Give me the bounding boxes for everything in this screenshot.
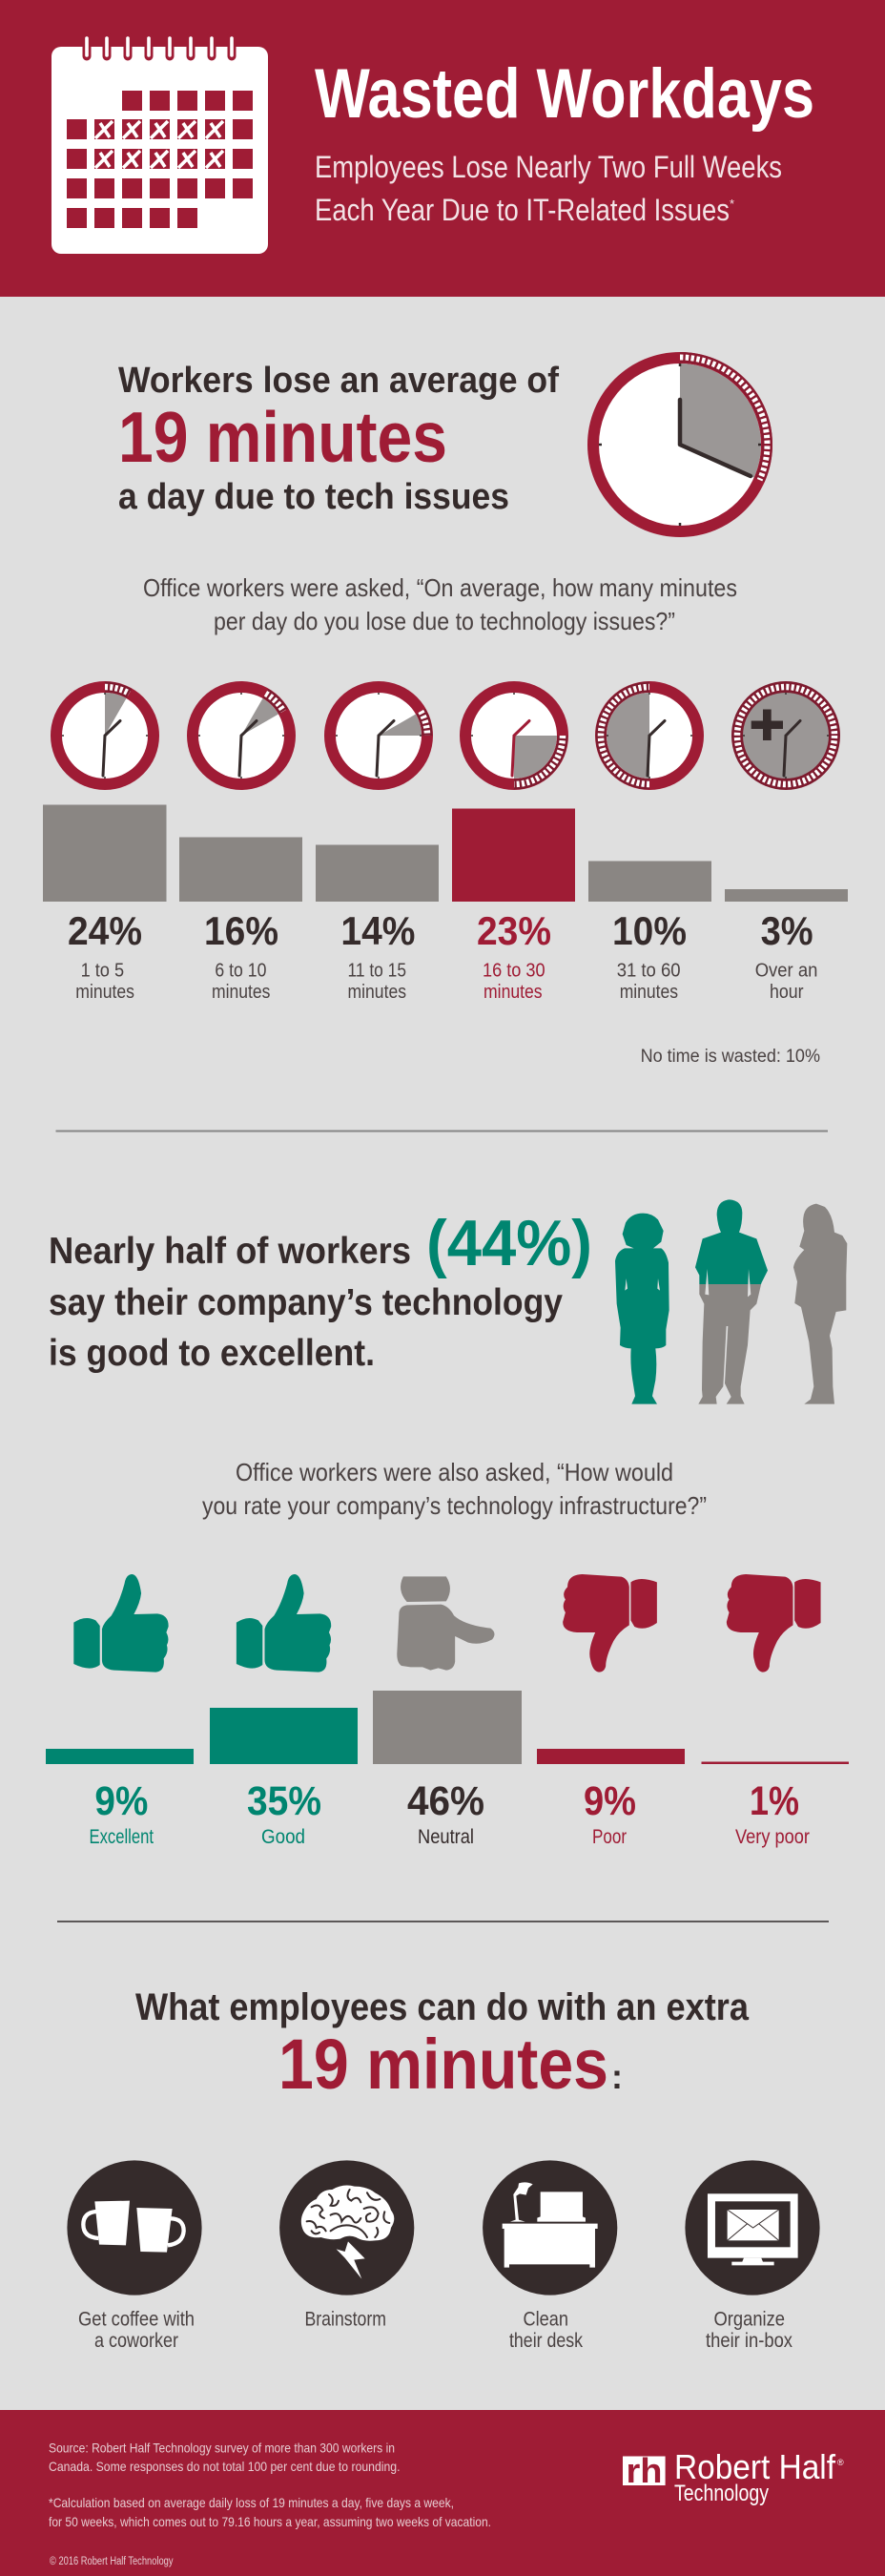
labels: activities: Organize [713,2309,785,2330]
bar labels: minutes lost: 31 to 60 [617,960,681,981]
heading: extra 19 minutes: 19 minutes [278,2025,608,2104]
logo: Robert Half Technology: Robert Half [674,2447,836,2486]
bar labels: minutes lost [75,960,817,1003]
bar labels: minutes lost: 6 to 10 [215,960,266,981]
percentages: technology rating: 35% [247,1778,321,1824]
percentages: technology rating: 9% [94,1778,148,1824]
bar labels: minutes lost: 11 to 15 [347,960,406,981]
bar labels: minutes lost: minutes [484,982,543,1003]
percentages: minutes lost: 3% [761,908,813,953]
subtitle: Employees Lose Nearly Two Full Weeks [315,150,782,184]
logo: Robert Half Technology: ® [837,2458,844,2467]
source notes: for 50 weeks, which comes out to 79.16 hours a year, assuming two weeks of vacation. [49,2514,491,2529]
labels: activities: Get coffee with [78,2309,195,2330]
icon: thumb up good [237,1574,331,1672]
silhouette: man [695,1199,768,1404]
question 2: Office workers were also asked, “How would [236,1458,673,1486]
heading: 19 minutes a day: 19 minutes [118,397,447,477]
heading: 44 percent: say their company’s technology [49,1282,563,1323]
percentages: minutes lost: 14% [340,908,415,953]
percentages: minutes lost: 16% [204,908,278,953]
clock: 1 to 5 minutes [51,681,159,790]
panel: header [0,0,885,297]
question 2: you rate your company’s technology infrastructure?” [202,1491,707,1520]
labels: activities: their desk [509,2330,583,2352]
heading: extra 19 minutes: What employees can do with an extra [135,1986,750,2028]
heading: 19 minutes a day: a day due to tech issues [118,477,509,517]
subtitle: * [730,197,734,211]
heading: 19 minutes a day [118,361,559,517]
heading: 44 percent: (44%) [426,1207,592,1279]
logo: Robert Half Technology [623,2447,844,2506]
silhouette: woman with long hair [793,1204,847,1404]
source notes [49,2441,491,2567]
icon: thumb sideways neutral [397,1576,494,1671]
icon: calendar [51,36,268,254]
labels: activities: Clean [523,2309,568,2330]
percentages: minutes lost: 24% [68,908,142,953]
source notes: © 2016 Robert Half Technology [50,2556,174,2567]
bar labels: minutes lost: minutes [620,982,678,1003]
icon: coffee mugs [67,2160,202,2296]
clock: 6 to 10 minutes [187,681,296,790]
percentages: minutes lost: 23% [477,908,551,953]
logo: Robert Half Technology: rh [626,2451,662,2490]
source notes: Source: Robert Half Technology survey of more than 300 workers in [49,2441,395,2456]
bar labels: minutes lost: minutes [212,982,270,1003]
question 1: Office workers were asked, “On average, how many minutes [143,573,737,602]
subtitle: Each Year Due to IT-Related Issues [315,193,730,227]
bar labels: minutes lost: hour [770,982,804,1003]
question 1 [143,573,737,635]
heading: 44 percent: Nearly half of workers [49,1231,411,1272]
subtitle [315,150,782,227]
icon: desk [483,2160,617,2296]
source notes: *Calculation based on average daily loss of 19 minutes a day, five days a week, [49,2495,454,2510]
percentages: minutes lost: 10% [612,908,687,953]
bar chart: technology rating [46,1691,849,1764]
clock: over an hour [731,681,840,790]
heading: extra 19 minutes [135,1986,750,2104]
icon: thumb down poor [563,1574,657,1672]
labels: activities: a coworker [94,2330,178,2352]
clock: 16 to 30 minutes [460,681,568,790]
bar labels: technology rating [90,1826,810,1848]
icon: plus sign [751,710,783,740]
icon: monitor with envelope [685,2160,820,2296]
bar chart: minutes lost [43,805,848,902]
bar labels: technology rating: Neutral [418,1826,474,1848]
bar labels: technology rating: Good [261,1826,305,1848]
icon: thumb down very poor [727,1574,821,1672]
percentages: technology rating: 1% [750,1778,799,1824]
percentages: technology rating: 46% [407,1778,484,1824]
bar labels: minutes lost: 16 to 30 [483,960,545,981]
icon: large clock showing 19 minutes [587,352,772,537]
question 2 [202,1458,707,1520]
clock: 31 to 60 minutes [595,681,704,790]
icon: thumb up excellent [73,1574,169,1672]
labels: activities [78,2309,792,2352]
percentages: minutes lost [68,908,813,953]
silhouette: woman with curly hair [615,1214,669,1404]
heading: 19 minutes a day: Workers lose an average of [118,361,559,401]
percentages: technology rating: 9% [584,1778,636,1824]
icon: three silhouettes [615,1199,847,1404]
icon: brain [279,2160,414,2296]
bar labels: minutes lost: Over an [755,960,817,981]
question 1: per day do you lose due to technology issues?” [214,607,675,635]
logo: Robert Half Technology: Technology [674,2481,769,2506]
heading: 44 percent: is good to excellent. [49,1333,375,1374]
heading: extra 19 minutes: : [611,2057,623,2096]
bar labels: minutes lost: minutes [75,982,134,1003]
bar labels: technology rating: Very poor [735,1826,810,1848]
icons: thumbs [73,1574,821,1672]
heading: 44 percent [49,1207,592,1374]
labels: activities: their in-box [706,2330,792,2352]
bar labels: technology rating: Excellent [90,1826,154,1848]
bar labels: minutes lost: 1 to 5 [81,960,124,981]
bar labels: minutes lost: minutes [347,982,406,1003]
clock: 11 to 15 minutes [324,681,433,790]
percentages: technology rating [94,1778,799,1824]
panel: footer [0,2410,885,2576]
labels: activities: Brainstorm [305,2309,386,2330]
bar labels: technology rating: Poor [592,1826,627,1848]
source notes: Canada. Some responses do not total 100 per cent due to rounding. [49,2459,401,2474]
note: no time wasted: No time is wasted: 10% [641,1047,820,1067]
